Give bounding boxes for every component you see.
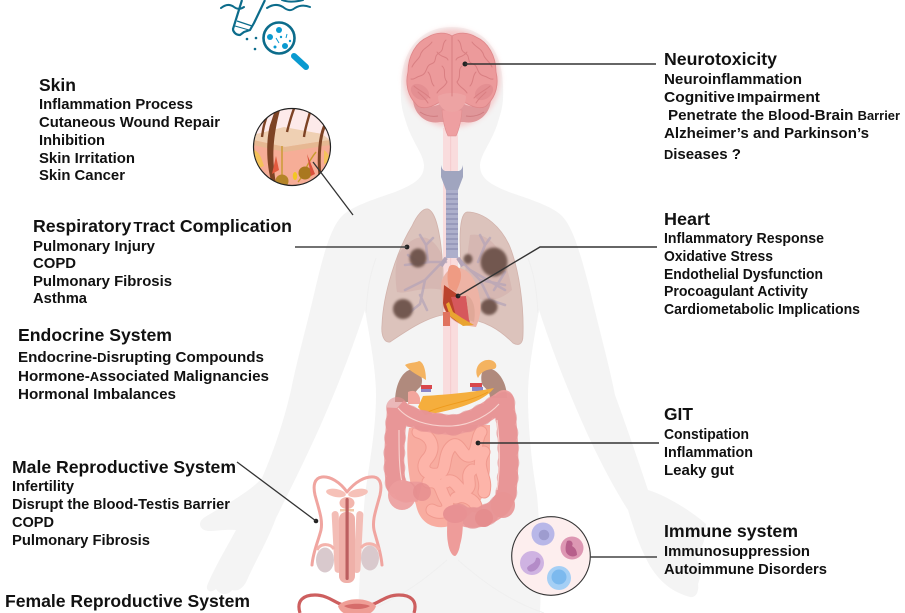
leader line: skin <box>313 162 353 215</box>
text: respiratory tract <box>33 216 292 307</box>
immune cells inset <box>512 517 590 595</box>
female reproductive system <box>299 595 415 613</box>
text: male reproductive system: COPD <box>12 515 54 531</box>
text: GIT: Leaky gut <box>664 463 734 479</box>
lung lesions <box>393 248 508 319</box>
seminal vesicles <box>325 487 347 499</box>
heart <box>441 265 481 327</box>
leader line: respiratory <box>295 245 409 249</box>
right adrenal <box>476 360 496 378</box>
text: heart <box>664 209 860 318</box>
text: heart: Endothelial Dysfunction <box>664 267 823 283</box>
leader line: heart <box>456 247 657 298</box>
text: skin: Skin Cancer <box>39 168 125 184</box>
text: endocrine system <box>18 325 269 403</box>
right lung <box>460 212 523 344</box>
prostate <box>340 497 354 509</box>
water waves <box>221 0 310 10</box>
right kidney <box>481 368 507 398</box>
neutrophil pink <box>560 536 584 560</box>
vas deferens tubes <box>312 477 382 565</box>
text: male reproductive system <box>12 457 236 549</box>
pons <box>438 93 466 112</box>
temporal lobes <box>408 81 432 103</box>
brain glow <box>404 29 500 127</box>
text: respiratory tract: Pulmonary Fibrosis <box>33 274 172 290</box>
spinal cord <box>443 128 458 398</box>
text: male reproductive system: Male Reproductive System <box>12 457 236 477</box>
lungs <box>382 209 523 344</box>
left adrenal <box>405 361 426 380</box>
text: immune system: Immune system <box>664 521 798 541</box>
left lung <box>382 209 443 342</box>
text: male reproductive system: Disrupt the Blood-Testis Barrier <box>12 497 230 513</box>
testes <box>316 548 334 572</box>
brain gyri <box>411 36 493 103</box>
text: neurotoxicity <box>664 49 900 163</box>
leader line: GIT <box>476 441 659 445</box>
text: skin: Inflammation Process <box>39 97 193 113</box>
text: skin: Skin <box>39 75 76 95</box>
environmental microplastics icon <box>221 0 310 67</box>
text: respiratory tract: Asthma <box>33 291 88 307</box>
bronchial tree <box>405 235 505 312</box>
brain stem <box>442 110 462 136</box>
text: heart: Cardiometabolic Implications <box>664 302 860 318</box>
trachea <box>441 165 463 266</box>
caecum <box>388 480 416 510</box>
text: neurotoxicity: Neurotoxicity <box>664 49 777 69</box>
shaft <box>331 511 342 573</box>
magnifying glass <box>264 22 294 54</box>
monocyte purple <box>520 551 544 575</box>
particles <box>246 37 257 50</box>
text: neurotoxicity: Penetrate the Blood-Brain Barrier <box>668 108 900 124</box>
text: neurotoxicity: Alzheimer’s and Parkinson’s <box>664 126 869 142</box>
text: respiratory tract: Respiratory Tract Complication <box>33 216 292 236</box>
text: heart: Heart <box>664 209 710 229</box>
text: endocrine system: Endocrine System <box>18 325 172 345</box>
rectum <box>447 509 463 556</box>
text: heart: Oxidative Stress <box>664 249 773 265</box>
text: skin <box>39 75 220 184</box>
text: heart: Procoagulant Activity <box>664 284 809 300</box>
kidneys and adrenal glands <box>395 360 507 404</box>
text: GIT: GIT <box>664 404 693 424</box>
lymphocyte lavender <box>532 522 554 546</box>
text: heart: Inflammatory Response <box>664 231 824 247</box>
cerebrum <box>407 33 497 108</box>
text: male reproductive system: Pulmonary Fibrosis <box>12 533 150 549</box>
text: immune system: Immunosuppression <box>664 544 810 560</box>
text: female reproductive system: Female Reproductive System <box>5 591 250 611</box>
body silhouette <box>200 27 706 613</box>
brain <box>404 29 500 136</box>
leader line: neurotoxicity <box>462 62 656 66</box>
text: skin: Inhibition <box>39 133 105 149</box>
large intestine <box>388 400 515 556</box>
text: GIT: Inflammation <box>664 445 753 461</box>
male reproductive system <box>312 477 382 583</box>
text: neurotoxicity: Neuroinflammation <box>664 72 802 88</box>
small intestine <box>407 425 490 527</box>
skin cross-section inset <box>252 106 332 190</box>
text: male reproductive system: Infertility <box>12 479 75 495</box>
text: skin: Cutaneous Wound Repair <box>39 115 220 131</box>
text: neurotoxicity: Diseases ? <box>664 147 741 163</box>
blue cell <box>547 566 571 590</box>
text: neurotoxicity: Cognitive Impairment <box>664 90 820 106</box>
left kidney <box>395 369 422 402</box>
leader line: male reproductive <box>237 462 318 523</box>
text: immune system: Autoimmune Disorders <box>664 562 827 578</box>
text: endocrine system: Endocrine-Disrupting Compounds <box>18 350 264 366</box>
leader line: immune <box>590 556 657 558</box>
text: respiratory tract: Pulmonary Injury <box>33 239 156 255</box>
text: GIT: Constipation <box>664 427 749 443</box>
text: endocrine system: Hormonal Imbalances <box>18 387 176 403</box>
cerebellum <box>413 100 491 122</box>
bottle <box>233 0 265 35</box>
pancreas <box>418 388 494 415</box>
text: immune system <box>664 521 827 578</box>
text: respiratory tract: COPD <box>33 256 76 272</box>
text: endocrine system: Hormone-Associated Malignancies <box>18 369 269 385</box>
text: skin: Skin Irritation <box>39 151 135 167</box>
text: GIT <box>664 404 753 479</box>
